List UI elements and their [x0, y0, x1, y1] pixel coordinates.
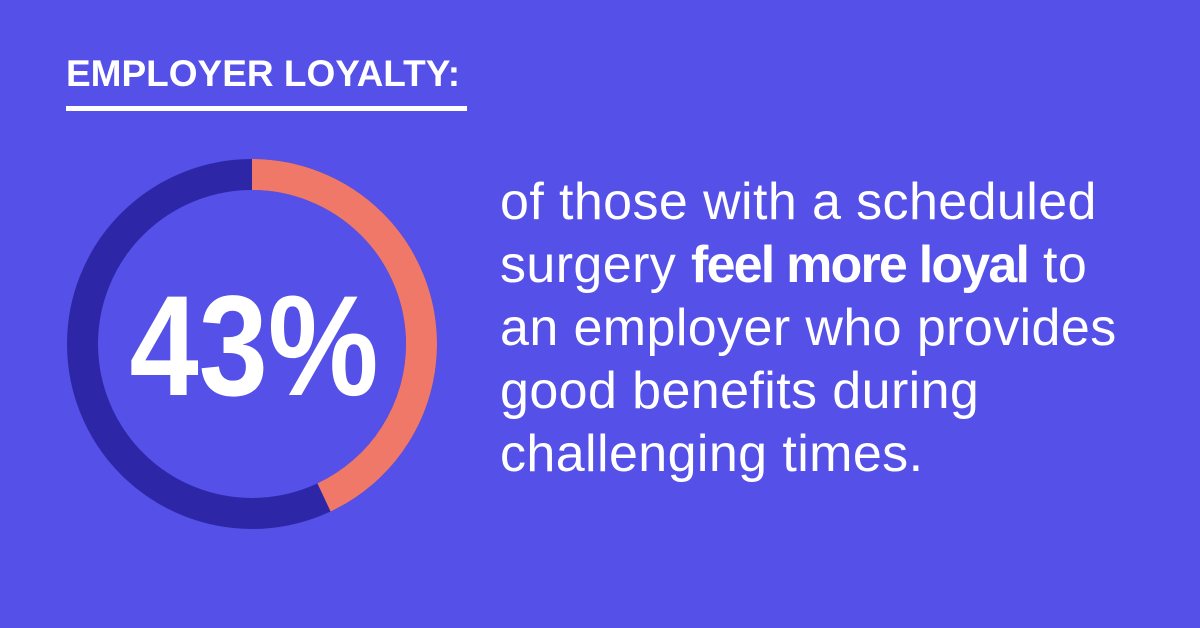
title underline — [66, 106, 467, 111]
description text: of those with a scheduled — [500, 173, 1097, 231]
description text: good benefits during — [500, 362, 979, 420]
title: EMPLOYER LOYALTY: — [66, 53, 460, 94]
description text: challenging times. — [500, 425, 923, 483]
description text: an employer who provides — [500, 299, 1117, 357]
description text: surgery feel more loyal to — [500, 236, 1087, 294]
percentage: 43% — [129, 267, 379, 426]
description text — [500, 173, 1117, 483]
